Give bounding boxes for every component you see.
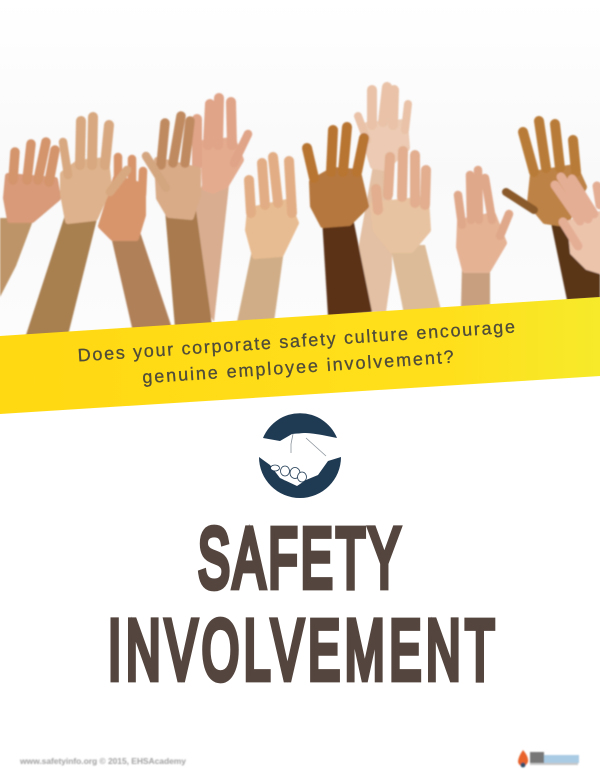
hand 6 bbox=[237, 157, 296, 322]
hand 1 bbox=[0, 142, 58, 297]
hand 9: front pale hand bbox=[373, 151, 441, 314]
footer logo bbox=[518, 750, 579, 768]
hand 10 bbox=[458, 170, 509, 308]
hand 8: pale back hand bbox=[358, 87, 408, 312]
banner question text: genuine employee involvement? bbox=[142, 347, 454, 387]
title: INVOLVEMENT bbox=[108, 604, 494, 697]
banner question text: Does your corporate safety culture encourage bbox=[77, 317, 515, 366]
hand 3: behind hand bbox=[101, 157, 172, 332]
hand 7: dark hand bbox=[307, 127, 372, 316]
banner question text bbox=[77, 317, 517, 391]
hand 12: right pale hand bbox=[555, 177, 600, 272]
hand 2: large left hand bbox=[25, 117, 127, 338]
title: SAFETY bbox=[198, 512, 400, 605]
yellow banner bbox=[0, 297, 600, 414]
icon: handshake in circle bbox=[259, 413, 341, 498]
hand 11: right brown hand bbox=[506, 121, 600, 300]
hand 5: tall pale arm hand bbox=[194, 98, 248, 322]
hand 4 bbox=[146, 116, 212, 328]
title bbox=[108, 512, 494, 697]
footer website and copyright: www.safetyinfo.org © 2015, EHSAcademy bbox=[19, 756, 186, 766]
raised hands photo bbox=[0, 87, 600, 338]
